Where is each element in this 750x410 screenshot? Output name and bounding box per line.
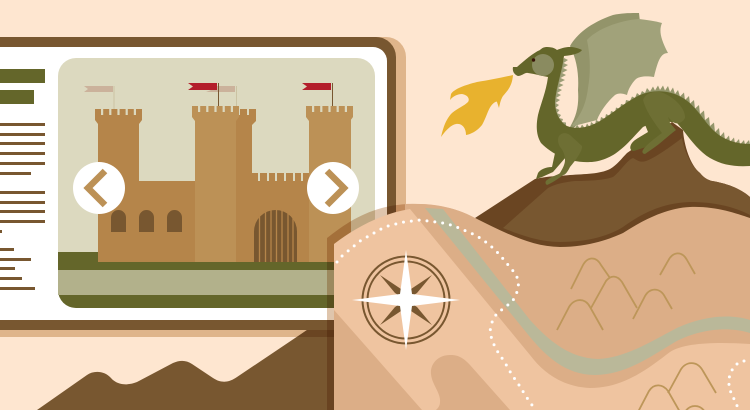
map hill shade [431,355,510,410]
body [513,47,750,166]
dragon [441,13,750,185]
back spines [570,86,750,150]
flags [84,83,333,110]
hill sketches [557,253,716,410]
map lower left shade [334,310,422,410]
map translucent edge [327,204,475,410]
back wing [570,13,640,127]
middle tower [192,106,239,262]
left tower [95,109,142,262]
right mountain [475,122,750,260]
compass [352,250,460,350]
heading bars [0,69,45,104]
neck spines [550,58,568,126]
eye [532,58,535,62]
map parchment [405,204,750,410]
front haunch and leg [546,133,582,185]
door [254,208,297,262]
tablet [0,37,406,337]
text panel [0,69,45,290]
screen with castle scene [58,58,375,308]
windows [111,210,182,232]
castle [95,106,353,262]
river [425,208,750,375]
ground [58,252,375,308]
right tower [306,106,353,262]
bottom left mountain [37,330,345,410]
castle walls [98,109,310,262]
ground strip [98,262,375,270]
text lines [0,123,45,290]
fire breath [441,75,513,137]
dotted route [337,220,534,408]
dotted route right [729,361,744,408]
left arrow button [73,162,125,214]
treasure map [327,204,750,410]
far legs [536,118,664,179]
front wing [570,19,668,127]
rear haunch and leg [642,92,685,154]
right arrow button [307,162,359,214]
wall crenels [258,173,303,181]
eye patch [532,54,554,76]
map light area [334,209,750,410]
